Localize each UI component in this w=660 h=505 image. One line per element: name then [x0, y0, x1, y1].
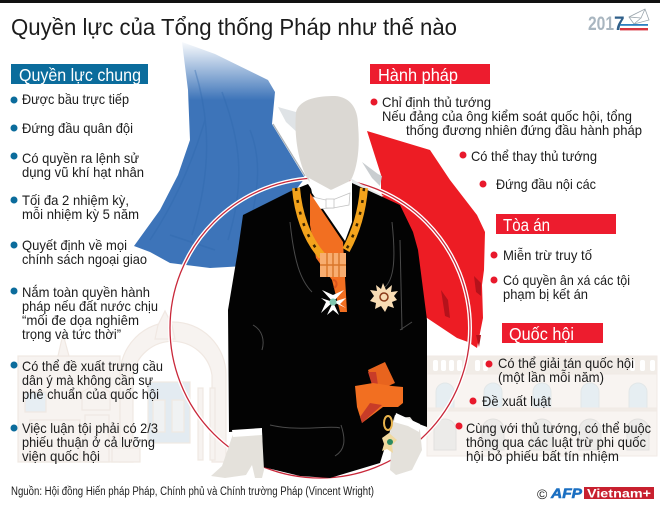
- list: executive powers: Có thể thay thủ tướng: [471, 148, 597, 164]
- orange sash knot: [355, 362, 403, 423]
- list: judicial powers: Có quyền ân xá các tội: [503, 272, 630, 288]
- list: general powers: Việc luận tội phải có 2/3: [22, 420, 158, 436]
- list: general powers: Nắm toàn quyền hành: [22, 284, 150, 300]
- list: general powers: dụng vũ khí hạt nhân: [22, 164, 144, 180]
- logo: 2017 election: 7: [614, 14, 625, 35]
- list: parliament powers: hội bỏ phiếu bất tín nhiệm: [466, 448, 619, 464]
- list: general powers: mỗi nhiệm kỳ 5 năm: [22, 206, 139, 222]
- list: executive powers: [370, 94, 642, 192]
- logo: 2017 election: 201: [588, 14, 614, 35]
- credit: AFP Vietnam+ logo: ©: [537, 486, 548, 502]
- list: general powers: dân ý mà không cần sự: [22, 372, 153, 388]
- list: parliament powers: Có thể giải tán quốc hội: [498, 355, 634, 371]
- gold chain: [296, 188, 364, 256]
- logo: 2017 election: [588, 9, 649, 35]
- list: general powers: Có quyền ra lệnh sử: [22, 150, 139, 166]
- bow tie: [313, 193, 350, 209]
- heading: Quốc hội: [502, 323, 603, 344]
- list: general powers: trọng và tức thời”: [22, 326, 121, 342]
- source note: Nguồn: Hội đồng Hiến pháp Pháp, Chính phủ và Chính trường Pháp (Vincent Wright): [11, 486, 374, 498]
- red flag: [367, 131, 485, 348]
- list: general powers: “mối đe dọa nghiêm: [22, 312, 139, 328]
- jacket fold highlights: [253, 222, 412, 456]
- list: general powers: phê chuẩn của quốc hội: [22, 386, 159, 402]
- list: parliament powers: thông qua các luật trừ phi quốc: [466, 434, 646, 450]
- heading: Tòa án: Tòa án: [503, 215, 550, 235]
- list: general powers: pháp nếu đất nước chịu: [22, 298, 158, 314]
- chain pendant: [320, 253, 346, 288]
- building illustration: right: [427, 356, 657, 456]
- credit: AFP Vietnam+ logo: [537, 485, 654, 502]
- shirt: [309, 178, 352, 241]
- building illustration: left: [18, 311, 226, 462]
- list: general powers: Đứng đầu quân đội: [22, 120, 133, 136]
- black jacket: [228, 183, 427, 478]
- blue flag: [134, 42, 305, 268]
- list: executive powers: thống đương nhiên đứng đầu hành pháp: [406, 122, 642, 138]
- list: general powers: chính sách ngoại giao: [22, 251, 147, 267]
- orange sash: [310, 193, 347, 312]
- list: general powers: Được bầu trực tiếp: [22, 91, 129, 107]
- list: judicial powers: Miễn trừ truy tố: [503, 247, 592, 263]
- medal ribbon pendant: [382, 416, 397, 453]
- list: parliament powers: Đề xuất luật: [482, 393, 551, 409]
- president silhouette: head and collar wings: [273, 96, 384, 200]
- list: executive powers: Chỉ định thủ tướng: [382, 94, 491, 110]
- credit: AFP Vietnam+ logo: AFP: [550, 485, 583, 501]
- heading: Hành pháp: [370, 64, 490, 85]
- list: executive powers: Đứng đầu nội các: [496, 176, 596, 192]
- list: parliament powers: (một lần mỗi năm): [498, 369, 604, 385]
- list: general powers: Tối đa 2 nhiệm kỳ,: [22, 192, 129, 208]
- left hand: [211, 428, 264, 478]
- heading: Tòa án: [496, 214, 616, 235]
- right hand: [388, 413, 422, 475]
- list: general powers: [10, 91, 163, 464]
- white cross medal: [321, 290, 346, 315]
- heading: Quốc hội: Quốc hội: [509, 324, 574, 344]
- heading: Hành pháp: Hành pháp: [378, 65, 458, 85]
- credit: AFP Vietnam+ logo: Vietnam+: [587, 486, 651, 500]
- list: general powers: Có thể đề xuất trưng cầu: [22, 358, 163, 374]
- title: Quyền lực của Tổng thống Pháp như thế nào: [11, 14, 457, 40]
- top bar: [0, 0, 660, 3]
- list: judicial powers: phạm bị kết án: [503, 286, 588, 302]
- heading: Quyền lực chung: Quyền lực chung: [19, 65, 141, 85]
- list: parliament powers: [456, 355, 651, 464]
- list: general powers: Quyết định về mọi: [22, 237, 127, 253]
- list: judicial powers: [490, 247, 630, 302]
- list: general powers: viện quốc hội: [22, 448, 100, 464]
- list: general powers: phiếu thuận ở cả lưỡng: [22, 434, 155, 450]
- list: executive powers: Nếu đảng của ông kiểm soát quốc hội, tổng: [382, 108, 632, 124]
- circle ring: [170, 178, 470, 478]
- star medal: [370, 283, 398, 312]
